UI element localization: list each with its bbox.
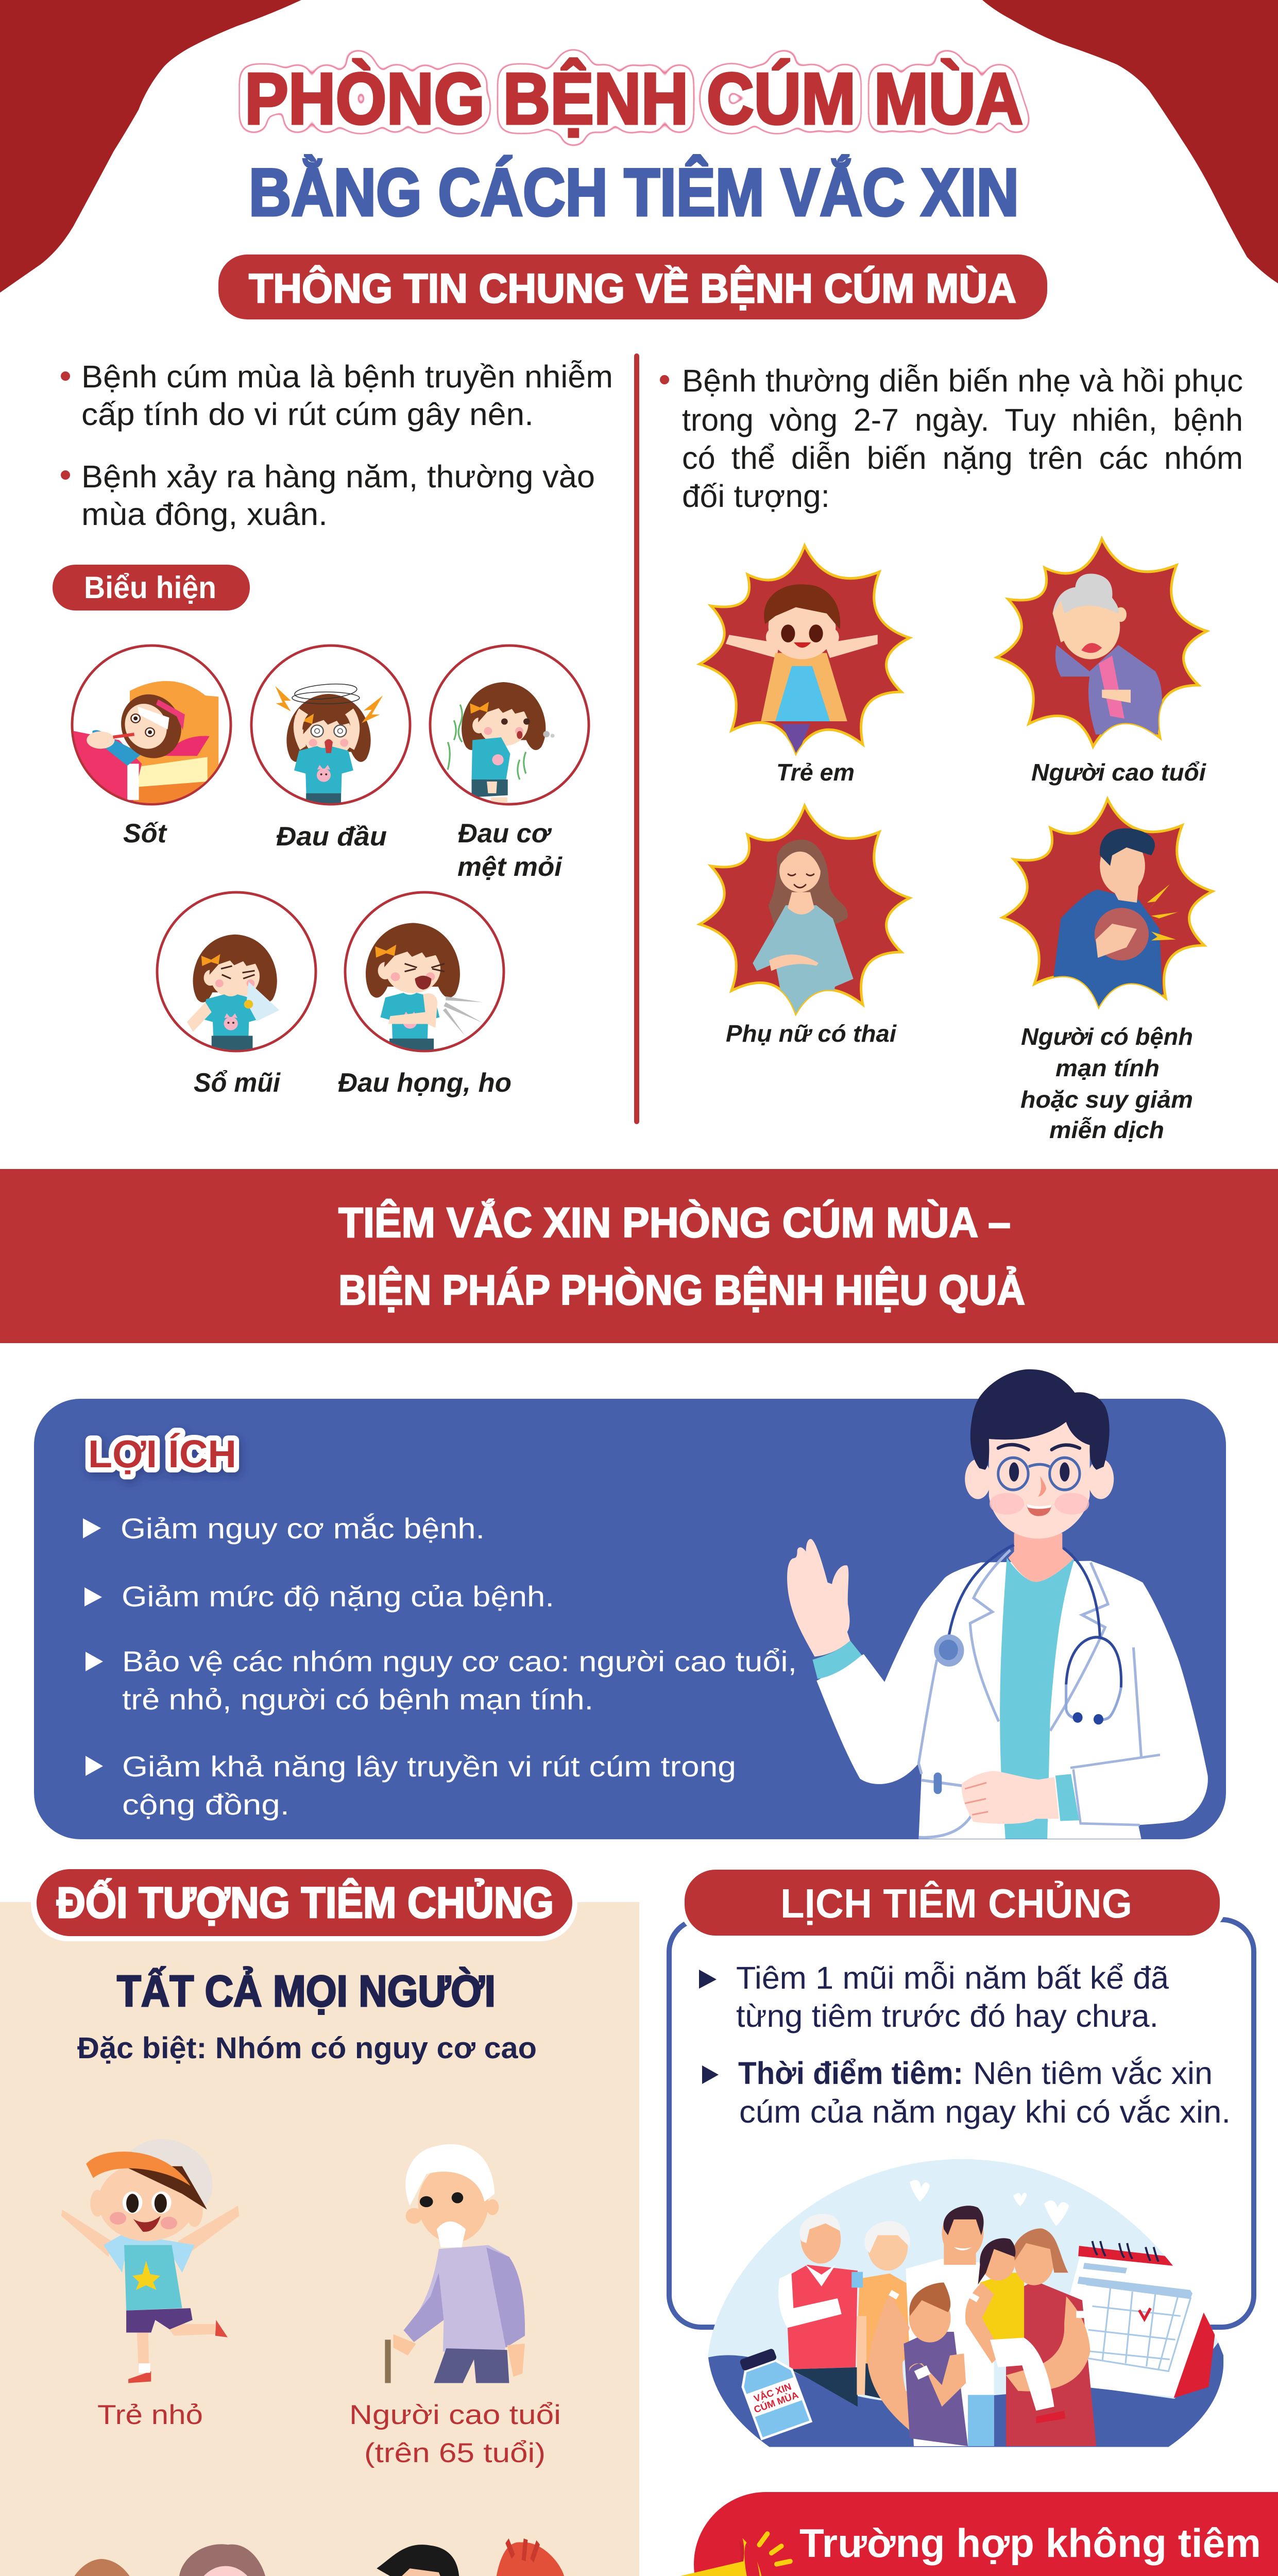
symptom labels: Đau đầu bbox=[276, 822, 387, 852]
at-risk group labels bbox=[726, 759, 1206, 1143]
panel: vaccination targets bbox=[0, 1867, 639, 2576]
icon: vaccine vial bbox=[734, 2345, 811, 2439]
text block: right bullet: Bệnh thường diễn biến nhẹ và hồi phục bbox=[682, 363, 1243, 398]
benefit list: Giảm khả năng lây truyền vi rút cúm trong bbox=[122, 1750, 736, 1783]
symptom labels: Đau cơ bbox=[458, 819, 552, 849]
text block: right bullet: đối tượng: bbox=[682, 479, 830, 514]
heading: targets: ĐỐI TƯỢNG TIÊM CHỦNG bbox=[57, 1878, 554, 1927]
illustration: vaccinated family bbox=[708, 2159, 1223, 2447]
panel: contraindications bbox=[666, 2492, 1278, 2576]
heading: targets bbox=[31, 1867, 577, 1941]
schedule text: Thời điểm tiêm: bbox=[738, 2056, 963, 2091]
schedule text: cúm của năm ngay khi có vắc xin. bbox=[739, 2094, 1231, 2129]
title line 2: BẰNG CÁCH TIÊM VẮC XIN bbox=[249, 155, 1019, 230]
target group labels bbox=[65, 2400, 595, 2576]
symptom labels: mệt mỏi bbox=[457, 852, 563, 882]
text block: left bullets: cấp tính do vi rút cúm gây nên. bbox=[81, 397, 534, 432]
schedule text bbox=[699, 1960, 1231, 2129]
heading: symptoms: Biểu hiện bbox=[84, 570, 216, 605]
divider bbox=[634, 353, 639, 1124]
icon: young child bbox=[61, 2139, 239, 2383]
band: vaccination headline bbox=[0, 1169, 1278, 1343]
heading: general information: THÔNG TIN CHUNG VỀ BỆNH CÚM MÙA bbox=[249, 265, 1016, 311]
benefit list bbox=[83, 1512, 797, 1821]
benefit list: Giảm mức độ nặng của bệnh. bbox=[122, 1580, 554, 1613]
at-risk group labels: Người cao tuổi bbox=[1031, 759, 1206, 786]
icon: fever bbox=[70, 646, 231, 809]
heading: contraindications: Trường hợp không tiêm bbox=[799, 2520, 1261, 2566]
icon: elderly person bbox=[385, 2144, 525, 2383]
benefit list: Bảo vệ các nhóm nguy cơ cao: người cao tuổi, bbox=[122, 1645, 797, 1677]
symptom labels: Đau họng, ho bbox=[338, 1068, 512, 1098]
heading: symptoms bbox=[53, 565, 250, 611]
at-risk group labels: Phụ nữ có thai bbox=[726, 1020, 897, 1047]
at-risk group labels: mạn tính bbox=[1055, 1055, 1160, 1081]
symptom labels: Sổ mũi bbox=[194, 1068, 281, 1098]
icon: runny nose bbox=[157, 892, 316, 1054]
curtain: top right bbox=[982, 0, 1278, 283]
icon: megaphone bbox=[666, 2534, 791, 2576]
icon: muscle ache bbox=[430, 646, 589, 805]
heading: benefits: LỢI ÍCH bbox=[88, 1432, 236, 1476]
at-risk group labels: Trẻ em bbox=[776, 759, 855, 786]
text block: left bullets bbox=[61, 359, 613, 532]
target group labels: (trên 65 tuổi) bbox=[364, 2438, 546, 2468]
icon: headache bbox=[251, 646, 410, 805]
subheading: high risk: Đặc biệt: Nhóm có nguy cơ cao bbox=[77, 2031, 537, 2065]
at-risk group labels: miễn dịch bbox=[1049, 1116, 1164, 1143]
panel: schedule bbox=[669, 1865, 1254, 2327]
band: vaccination headline: TIÊM VẮC XIN PHÒNG CÚM MÙA – bbox=[338, 1199, 1011, 1246]
panel: benefits bbox=[34, 1399, 1226, 1839]
benefit list: Giảm nguy cơ mắc bệnh. bbox=[121, 1512, 485, 1545]
symptom labels: Sốt bbox=[123, 819, 168, 849]
icon: chronic patient with heart bbox=[360, 2539, 565, 2576]
icon: elderly in burst bbox=[997, 539, 1207, 747]
icon: vaccine vial: VẮC XIN bbox=[752, 2381, 793, 2404]
schedule text: Nên tiêm vắc xin bbox=[973, 2056, 1213, 2091]
title bbox=[245, 58, 1023, 230]
subheading: everyone: TẤT CẢ MỌI NGƯỜI bbox=[117, 1967, 496, 2016]
symptom labels bbox=[123, 819, 563, 1098]
icon: sore throat bbox=[345, 892, 504, 1054]
heading: schedule bbox=[677, 1865, 1227, 1937]
icon: health workers bbox=[43, 2544, 271, 2576]
heading: contraindications bbox=[694, 2492, 1278, 2576]
icon: vaccine vial: CÚM MÙA bbox=[753, 2389, 800, 2415]
text block: right bullet bbox=[660, 363, 1243, 514]
heading: schedule: LỊCH TIÊM CHỦNG bbox=[780, 1880, 1132, 1926]
band: vaccination headline: BIỆN PHÁP PHÒNG BỆNH HIỆU QUẢ bbox=[338, 1267, 1025, 1314]
text block: right bullet: có thể diễn biến nặng trên các nhóm bbox=[682, 440, 1243, 476]
benefit list: cộng đồng. bbox=[122, 1788, 289, 1821]
illustration: doctor bbox=[787, 1369, 1208, 1839]
icon: child in burst bbox=[700, 546, 910, 755]
schedule text: Tiêm 1 mũi mỗi năm bất kể đã bbox=[736, 1960, 1169, 1995]
schedule text: từng tiêm trước đó hay chưa. bbox=[736, 1998, 1158, 2033]
target group labels: Trẻ nhỏ bbox=[97, 2400, 203, 2430]
heading: general information bbox=[218, 255, 1047, 319]
at-risk group labels: Người có bệnh bbox=[1021, 1023, 1193, 1050]
target group labels: Người cao tuổi bbox=[349, 2400, 561, 2430]
curtain: top left bbox=[0, 0, 301, 293]
at-risk group labels: hoặc suy giảm bbox=[1020, 1086, 1193, 1113]
icon: pregnant woman in burst bbox=[700, 806, 910, 1019]
benefit list: trẻ nhỏ, người có bệnh mạn tính. bbox=[122, 1683, 593, 1716]
text block: left bullets: mùa đông, xuân. bbox=[81, 497, 328, 532]
text block: right bullet: trong vòng 2-7 ngày. Tuy nhiên, bệnh bbox=[682, 402, 1243, 437]
text block: left bullets: Bệnh xảy ra hàng năm, thường vào bbox=[81, 459, 595, 494]
icon: chronic patient in burst bbox=[1002, 799, 1213, 1019]
title line 1: PHÒNG BỆNH CÚM MÙA bbox=[245, 58, 1023, 139]
text block: left bullets: Bệnh cúm mùa là bệnh truyền nhiễm bbox=[81, 359, 613, 394]
